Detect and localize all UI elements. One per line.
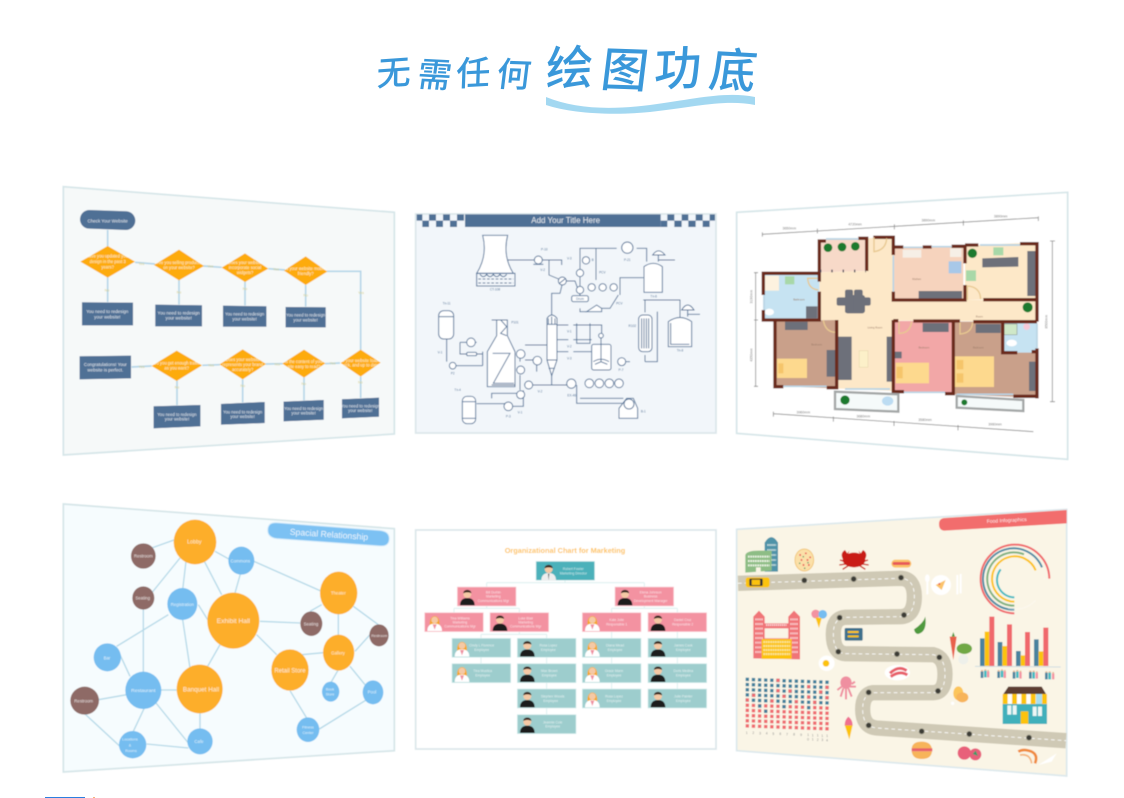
blue nodes bbox=[94, 547, 383, 758]
food banner bbox=[939, 510, 1067, 531]
diamond labels: Does your website bbox=[228, 260, 263, 265]
rooms bbox=[763, 237, 1037, 398]
dimension labels: 3680mm bbox=[857, 415, 870, 419]
action box labels: You need to redesign bbox=[223, 409, 263, 414]
flowchart sheet bbox=[63, 187, 394, 455]
box labels: Employee bbox=[608, 648, 623, 652]
dot matrix axis numbers: 2 bbox=[817, 738, 819, 742]
avatars bbox=[427, 590, 665, 733]
title underline wave bbox=[546, 95, 755, 114]
instruments: V-1 bbox=[438, 350, 443, 354]
pumps and valves: P-21 bbox=[624, 258, 631, 262]
tower building bbox=[753, 611, 800, 659]
node labels: Seating bbox=[304, 621, 319, 626]
pumps and valves: PCV bbox=[599, 270, 606, 274]
employee boxes bbox=[452, 638, 707, 734]
action box labels bbox=[84, 309, 381, 422]
dimension labels: 3890mm bbox=[922, 219, 935, 223]
instruments bbox=[438, 338, 646, 418]
header title: Add Your Title Here bbox=[531, 216, 601, 225]
diamond labels: Are you selling products bbox=[157, 260, 201, 265]
diamond labels bbox=[86, 254, 382, 372]
cooling tower: CT-108 bbox=[490, 288, 500, 292]
dimension labels: 4720mm bbox=[848, 223, 862, 227]
yes and no labels bbox=[105, 262, 364, 390]
action box labels: website is perfect. bbox=[87, 367, 123, 372]
box labels: Rosa Lopez bbox=[539, 644, 558, 648]
box labels: Rosa Lopez bbox=[605, 695, 623, 699]
tanks: Tn-11 bbox=[443, 301, 451, 305]
decision diamonds row 1 bbox=[80, 246, 327, 285]
carrot and greens bbox=[950, 632, 972, 664]
diamond labels: accurately? bbox=[232, 367, 254, 372]
action box labels: your website! bbox=[165, 316, 192, 321]
banner: Spacial Relationship bbox=[290, 527, 369, 542]
action box labels: You need to redesign bbox=[158, 310, 200, 315]
tanks: Tn-8 bbox=[677, 349, 683, 353]
dimension labels: 3190mm bbox=[750, 290, 754, 303]
dot matrix axis numbers: 5 bbox=[772, 732, 774, 736]
node labels: Banquet Hall bbox=[183, 687, 219, 694]
room labels: Bedroom bbox=[811, 343, 823, 347]
box labels: Bill Durbin bbox=[486, 591, 501, 595]
box labels: Employee bbox=[541, 648, 556, 652]
peas bbox=[914, 617, 926, 634]
instruments: P2 bbox=[451, 371, 455, 375]
panel: spatial relationship bbox=[63, 504, 394, 772]
city buildings bbox=[745, 537, 778, 573]
dimension labels: 4350mm bbox=[750, 348, 754, 362]
furnace bbox=[487, 320, 519, 387]
diamond labels: widgets? bbox=[237, 270, 254, 275]
action box labels: You need to redesign bbox=[286, 312, 326, 317]
instruments: P-7 bbox=[619, 368, 624, 372]
dimension labels: 3960mm bbox=[988, 423, 1002, 427]
node labels: Retail Store bbox=[274, 668, 306, 674]
diamond labels: Is the content of your bbox=[285, 359, 324, 364]
dot matrix axis numbers: 0 bbox=[807, 737, 809, 741]
panel: organizational chart bbox=[416, 530, 716, 749]
action box labels: your website! bbox=[165, 417, 189, 422]
box labels: Development Manager bbox=[634, 599, 668, 603]
node labels: Bar bbox=[104, 655, 111, 660]
diamond labels: Is your website loads bbox=[341, 358, 380, 363]
action box labels: You need to redesign bbox=[284, 406, 324, 411]
pipework bbox=[508, 248, 680, 362]
bottom edge marks bbox=[45, 797, 95, 798]
box labels: Employee bbox=[545, 725, 560, 729]
tanks: Tn-6 bbox=[650, 294, 657, 298]
node labels: Restroom bbox=[371, 634, 387, 638]
dot matrix axis numbers: 1 bbox=[812, 738, 814, 742]
director box: Robert Fowler bbox=[563, 567, 585, 571]
node labels: Rooms bbox=[125, 749, 137, 753]
dot matrix axis numbers: 4 bbox=[826, 738, 828, 742]
action box labels: your website! bbox=[230, 414, 255, 419]
action box labels: You need to redesign bbox=[225, 311, 265, 316]
arc chart bbox=[981, 545, 1049, 613]
start terminator: Check Your Website bbox=[88, 218, 128, 223]
box labels: Max Brown bbox=[541, 669, 558, 673]
pumps and valves: V-2 bbox=[540, 268, 545, 272]
people icons bbox=[981, 669, 1054, 679]
column: V-3 bbox=[567, 356, 572, 360]
dimension labels: 3650mm bbox=[783, 227, 796, 231]
column: V-1 bbox=[567, 330, 572, 334]
box labels: Luke Blair bbox=[518, 616, 534, 620]
yes and no labels: No bbox=[175, 386, 179, 390]
box labels: Employee bbox=[475, 673, 490, 677]
node labels bbox=[74, 540, 387, 753]
diamond labels: Does your website bbox=[226, 357, 260, 362]
action box labels: your website! bbox=[232, 316, 257, 321]
pumps and valves bbox=[533, 242, 633, 312]
box labels: Responsible 2 bbox=[672, 622, 693, 626]
taxi bbox=[746, 577, 770, 587]
box labels: Responsible 1 bbox=[606, 622, 627, 626]
box labels: Marketing bbox=[453, 620, 467, 624]
diamond labels: friendly? bbox=[298, 271, 314, 276]
director box: Marketing Director bbox=[560, 571, 588, 575]
box labels: Doris Medina bbox=[674, 669, 693, 673]
node labels: Restaurant bbox=[131, 688, 156, 694]
diamond labels: represents your brand bbox=[222, 362, 264, 367]
node labels: Locations bbox=[122, 737, 138, 741]
yes and no labels: Yes bbox=[208, 364, 214, 368]
hot dog bbox=[891, 560, 911, 568]
dimension labels: 3580mm bbox=[918, 418, 932, 422]
room labels: Bedroom bbox=[973, 345, 985, 349]
panel: process diagram bbox=[416, 214, 716, 433]
balloon ice cream bbox=[811, 610, 827, 628]
dot matrix axis numbers: 1 bbox=[746, 731, 748, 735]
yes and no labels: Yes bbox=[330, 361, 336, 365]
box labels: Communications Mgr bbox=[444, 625, 477, 629]
title: small text: 无需任何 bbox=[374, 54, 533, 96]
instruments: V-1 bbox=[518, 410, 523, 414]
diamond labels: quick, and up to date? bbox=[340, 363, 382, 368]
diamond labels: years? bbox=[101, 264, 115, 269]
dot matrix axis numbers bbox=[746, 731, 828, 742]
title: large text: 绘图功底 bbox=[542, 41, 761, 98]
node labels: Fitness bbox=[302, 726, 314, 730]
box labels: Marketing bbox=[486, 595, 501, 599]
dot matrix chart bbox=[746, 679, 829, 729]
column bbox=[547, 315, 572, 376]
relationship lines bbox=[85, 540, 378, 748]
box labels: Diana Mead bbox=[606, 644, 624, 648]
tanks bbox=[439, 251, 700, 424]
menu sign bbox=[845, 628, 863, 641]
dot matrix axis numbers: 8 bbox=[793, 733, 795, 737]
dot matrix axis numbers: 2 bbox=[752, 731, 754, 735]
action box labels: You need to redesign bbox=[157, 412, 197, 417]
plate and cutlery bbox=[925, 574, 961, 595]
meat plate bbox=[885, 665, 910, 680]
node labels: Pool bbox=[368, 690, 376, 695]
yes and no labels: No bbox=[303, 294, 308, 298]
box labels: Stephen Woods bbox=[541, 695, 565, 699]
box labels: Jeannie Cole bbox=[543, 720, 563, 724]
dot matrix axis numbers: 1 bbox=[826, 734, 828, 738]
diamond labels: as you want? bbox=[164, 366, 190, 371]
burger bbox=[912, 742, 932, 759]
octopus bbox=[837, 676, 856, 699]
orange nodes bbox=[174, 520, 357, 713]
brown nodes bbox=[70, 543, 389, 715]
box labels: Communications Mgr bbox=[510, 625, 542, 629]
box labels: Daniel Cruz bbox=[674, 618, 692, 622]
org connectors bbox=[454, 580, 677, 714]
box labels: Communications Mgr bbox=[478, 599, 510, 603]
yes and no labels: No bbox=[358, 380, 363, 384]
dot matrix axis numbers: 1 bbox=[821, 734, 823, 738]
action box labels: You need to redesign bbox=[86, 309, 129, 314]
yes and no labels: No bbox=[301, 382, 306, 386]
floor plan sheet bbox=[737, 192, 1068, 459]
yes and no labels: Yes bbox=[207, 265, 213, 269]
node labels: Restroom bbox=[74, 698, 93, 703]
action box labels: your website! bbox=[94, 315, 121, 320]
title bbox=[374, 41, 761, 114]
dot matrix axis numbers: 9 bbox=[800, 733, 802, 737]
ice cream cone bbox=[845, 717, 853, 739]
dimension labels: 8500mm bbox=[1045, 315, 1049, 328]
bar chart bbox=[975, 617, 1061, 667]
winding road bbox=[738, 578, 1066, 741]
box labels: Julie Painter bbox=[674, 695, 693, 699]
director box bbox=[536, 561, 595, 580]
box labels: Kate Jolie bbox=[609, 618, 624, 622]
room labels bbox=[793, 277, 985, 349]
dot matrix axis numbers: 7 bbox=[786, 732, 788, 736]
panel: flowchart bbox=[63, 187, 394, 455]
decision diamonds row 2 bbox=[152, 349, 381, 381]
box labels: Employee bbox=[543, 699, 558, 703]
header checker band bbox=[417, 214, 715, 227]
node labels: Restroom bbox=[134, 554, 153, 559]
diamond labels: Is your website mobile bbox=[285, 266, 327, 271]
box labels: Employee bbox=[474, 648, 489, 652]
instruments: B-1 bbox=[641, 410, 646, 414]
action box labels: your website! bbox=[348, 408, 373, 413]
node labels: Exhibit Hall bbox=[217, 618, 250, 625]
fried egg bbox=[819, 656, 835, 671]
room labels: Bathroom bbox=[793, 298, 806, 302]
yes and no labels: No bbox=[177, 291, 181, 295]
plants bbox=[824, 242, 1033, 406]
yes and no labels: No bbox=[243, 287, 247, 291]
bubble sheet bbox=[63, 504, 394, 772]
diamond labels: Have you updated your bbox=[86, 254, 130, 259]
diamond labels: on your website? bbox=[163, 265, 195, 270]
node labels: Store bbox=[326, 693, 334, 697]
box labels bbox=[444, 591, 693, 729]
action box labels: Congratulations! Your bbox=[84, 362, 127, 367]
shop bbox=[1003, 687, 1047, 724]
start terminator bbox=[80, 210, 136, 230]
box labels: Employee bbox=[676, 648, 691, 652]
food sheet bbox=[737, 509, 1067, 776]
windows and doors bbox=[764, 237, 1037, 394]
dot matrix axis numbers: 1 bbox=[807, 733, 809, 737]
tomato and veg bbox=[958, 746, 981, 760]
dimension labels: 3890mm bbox=[994, 215, 1008, 219]
yes and no labels: Yes bbox=[358, 291, 364, 295]
node labels: Book bbox=[326, 688, 334, 692]
beds and light furniture bbox=[765, 247, 1030, 387]
process sheet bbox=[416, 214, 716, 433]
panel: floor plan bbox=[737, 192, 1068, 459]
panel: food infographic bbox=[737, 509, 1067, 776]
box labels: Elena Johnson bbox=[640, 591, 662, 595]
node labels: Cafe bbox=[194, 739, 204, 744]
dot matrix axis numbers: 6 bbox=[779, 732, 781, 736]
box labels: Employee bbox=[607, 673, 622, 677]
node labels: & bbox=[129, 743, 132, 747]
yes and no labels: Yes bbox=[139, 365, 145, 369]
dot matrix axis numbers: 3 bbox=[821, 738, 823, 742]
box labels: Marketing bbox=[518, 620, 533, 624]
pumps and valves: V-3 bbox=[567, 256, 572, 260]
banner bbox=[268, 523, 389, 546]
box labels: Cindy L Florence bbox=[469, 644, 494, 648]
box labels: Employee bbox=[676, 699, 691, 703]
org chart title: Organizational Chart for Marketing bbox=[505, 546, 625, 555]
road stops bbox=[802, 575, 1032, 740]
diamond labels: site easy to read? bbox=[288, 364, 321, 369]
tanks: R102 bbox=[629, 324, 636, 328]
action boxes bbox=[79, 302, 379, 429]
yes and no labels: Yes bbox=[274, 362, 280, 366]
box labels: Employee bbox=[607, 699, 622, 703]
pumps and valves: PCV bbox=[616, 302, 623, 306]
org chart sheet bbox=[416, 530, 716, 749]
box labels: James Cook bbox=[674, 644, 693, 648]
yes and no labels: No bbox=[105, 288, 109, 292]
yes and no labels: Yes bbox=[273, 268, 279, 272]
action box labels: You need to redesign bbox=[341, 403, 381, 408]
box labels: Tina Williams bbox=[450, 616, 470, 620]
dimension labels bbox=[750, 215, 1049, 427]
dot matrix axis numbers: 4 bbox=[766, 732, 768, 736]
pumps and valves: P-10 bbox=[541, 248, 548, 252]
dimension lines bbox=[754, 216, 1055, 432]
room labels: Kitchen bbox=[912, 277, 922, 281]
node labels: Theater bbox=[331, 591, 346, 596]
manager boxes bbox=[425, 587, 707, 632]
column: V-2 bbox=[567, 344, 572, 348]
dot matrix axis numbers: 1 bbox=[812, 733, 814, 737]
chicken bbox=[951, 686, 968, 705]
pumps and valves: B bbox=[592, 258, 594, 262]
dot matrix axis numbers: 3 bbox=[759, 731, 761, 735]
diamond labels: Do you get enough traffic bbox=[153, 361, 200, 366]
node labels: Gallery bbox=[331, 651, 346, 656]
node labels: Center bbox=[303, 731, 314, 735]
crab bbox=[839, 550, 869, 569]
yes and no labels: Yes bbox=[138, 262, 144, 266]
action box labels: your website! bbox=[291, 411, 316, 416]
dot matrix exceptions bbox=[746, 679, 829, 713]
balconies bbox=[835, 392, 1023, 412]
walls bbox=[763, 237, 1037, 398]
room labels: Room bbox=[976, 315, 984, 319]
furnace: P101 bbox=[511, 320, 519, 324]
dimension labels: 3960mm bbox=[797, 411, 810, 415]
box labels: Business bbox=[644, 595, 658, 599]
room labels: Living Room bbox=[868, 326, 883, 330]
node labels: Lobby bbox=[187, 540, 202, 546]
yes and no labels: No bbox=[240, 384, 245, 388]
furniture bbox=[785, 251, 1036, 391]
room labels: Bedroom bbox=[919, 345, 930, 349]
tanks: Tn-4 bbox=[454, 388, 461, 392]
node labels: Registration bbox=[171, 602, 194, 607]
box labels: Tina Mustica bbox=[473, 669, 492, 673]
cooling tower bbox=[477, 235, 515, 292]
box labels: Grace Mann bbox=[605, 669, 623, 673]
pizza bbox=[795, 549, 814, 571]
node labels: Seating bbox=[135, 596, 151, 601]
box labels: Employee bbox=[676, 673, 691, 677]
box labels: Employee bbox=[542, 673, 557, 677]
pumps and valves: Drum bbox=[576, 297, 584, 301]
dot matrix axis numbers: 1 bbox=[817, 734, 819, 738]
instruments: V-2 bbox=[538, 390, 543, 394]
instruments: P-3 bbox=[506, 414, 511, 418]
action box labels: your website! bbox=[293, 317, 318, 322]
instruments: EX-46 bbox=[567, 394, 576, 398]
diamond labels: design in the past 3 bbox=[90, 259, 126, 264]
flowchart connectors bbox=[108, 230, 361, 406]
shrimp and shell bbox=[1018, 750, 1057, 765]
food banner: Food Infographics bbox=[987, 517, 1027, 525]
diamond labels: incorporate social bbox=[229, 265, 261, 270]
node labels: Commons bbox=[230, 558, 250, 563]
